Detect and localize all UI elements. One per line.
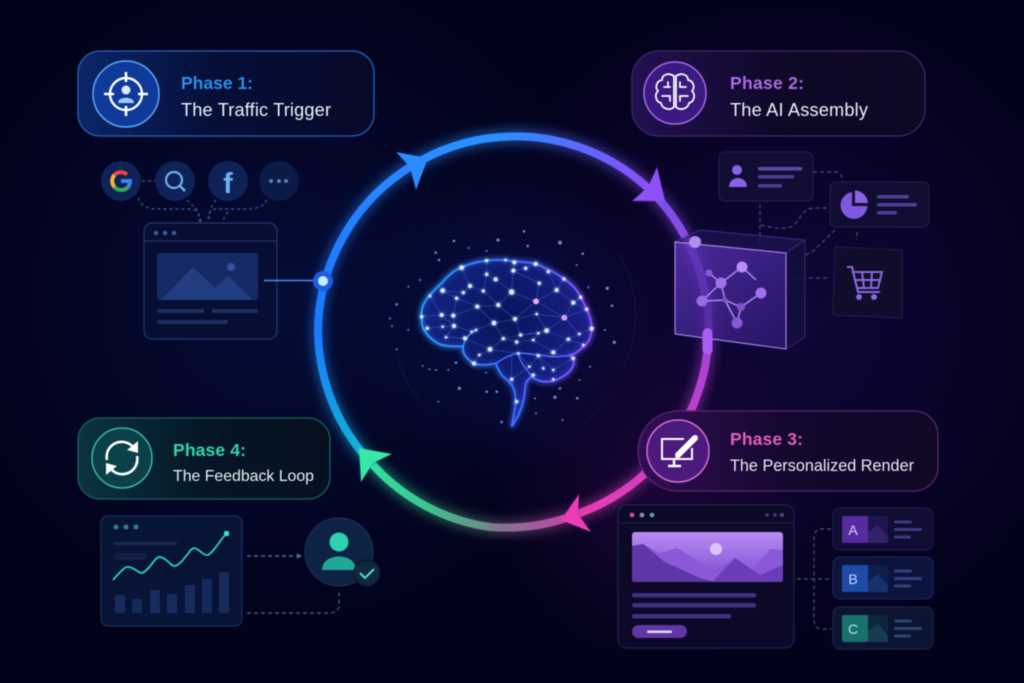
line chart xyxy=(113,534,226,580)
arrow: purple xyxy=(632,167,665,201)
card: variant A xyxy=(833,508,933,550)
connector: user back to dashboard xyxy=(247,590,339,613)
heading: Phase 3: Phase 3: xyxy=(730,429,803,449)
panel: Phase 1 header xyxy=(78,51,374,136)
icon: more xyxy=(259,161,299,201)
card: variant A: A xyxy=(848,522,858,538)
card: shopping cart xyxy=(833,247,902,318)
molecule graph xyxy=(696,262,766,328)
browser window: landing page xyxy=(144,223,277,339)
heading: Phase 1: Phase 1: xyxy=(181,73,253,93)
connectors: modules to cube xyxy=(760,172,857,278)
card: variant B: B xyxy=(848,571,858,587)
text: The Feedback Loop: The Feedback Loop xyxy=(173,468,314,485)
cube: assembly container xyxy=(675,230,805,350)
panel: Phase 3 header xyxy=(638,411,938,491)
bar chart xyxy=(115,572,229,613)
arrow: blue xyxy=(396,152,428,190)
connectors: sources to page xyxy=(138,181,267,222)
text: The Traffic Trigger: The Traffic Trigger xyxy=(181,100,331,120)
panel: Phase 2 header xyxy=(632,51,925,136)
icon: brain xyxy=(644,62,706,124)
arrowhead: to user xyxy=(297,553,302,559)
card: variant B xyxy=(833,557,933,599)
arrow: pink xyxy=(561,494,591,532)
panel: Phase 1 traffic sources xyxy=(101,161,333,339)
text: The AI Assembly: The AI Assembly xyxy=(730,100,869,120)
dashboard window xyxy=(101,516,242,626)
circular process ring xyxy=(318,136,709,528)
icon: refresh cycle xyxy=(92,428,152,488)
text: The Personalized Render: The Personalized Render xyxy=(730,457,915,475)
node on ring xyxy=(313,271,333,291)
browser window: rendered page xyxy=(618,505,794,648)
panel: Phase 3 personalized page xyxy=(618,505,933,649)
icon: Facebook: f xyxy=(223,168,233,200)
connector: dashboard to user xyxy=(247,555,300,557)
card: variant C: C xyxy=(848,621,858,637)
heading: Phase 4: Phase 4: xyxy=(173,440,246,460)
central brain network xyxy=(389,230,636,427)
icon: target with person xyxy=(93,61,159,127)
arrow: green xyxy=(359,448,392,482)
icon: verified user xyxy=(305,518,380,586)
icon: Facebook xyxy=(208,161,248,201)
icon: search xyxy=(155,161,195,201)
icon: Google xyxy=(101,161,141,201)
panel: Phase 2 assembly xyxy=(675,152,929,350)
panel: Phase 4 analytics feedback xyxy=(101,516,380,626)
card: pie chart xyxy=(830,182,929,227)
card: variant C xyxy=(833,607,933,649)
icon: monitor and pen xyxy=(647,420,709,482)
card: user profile xyxy=(719,152,813,201)
panel: Phase 4 header xyxy=(78,418,330,499)
connector: page to ring xyxy=(264,280,323,282)
connectors: page to variants xyxy=(797,529,831,629)
heading: Phase 2: Phase 2: xyxy=(730,73,804,93)
